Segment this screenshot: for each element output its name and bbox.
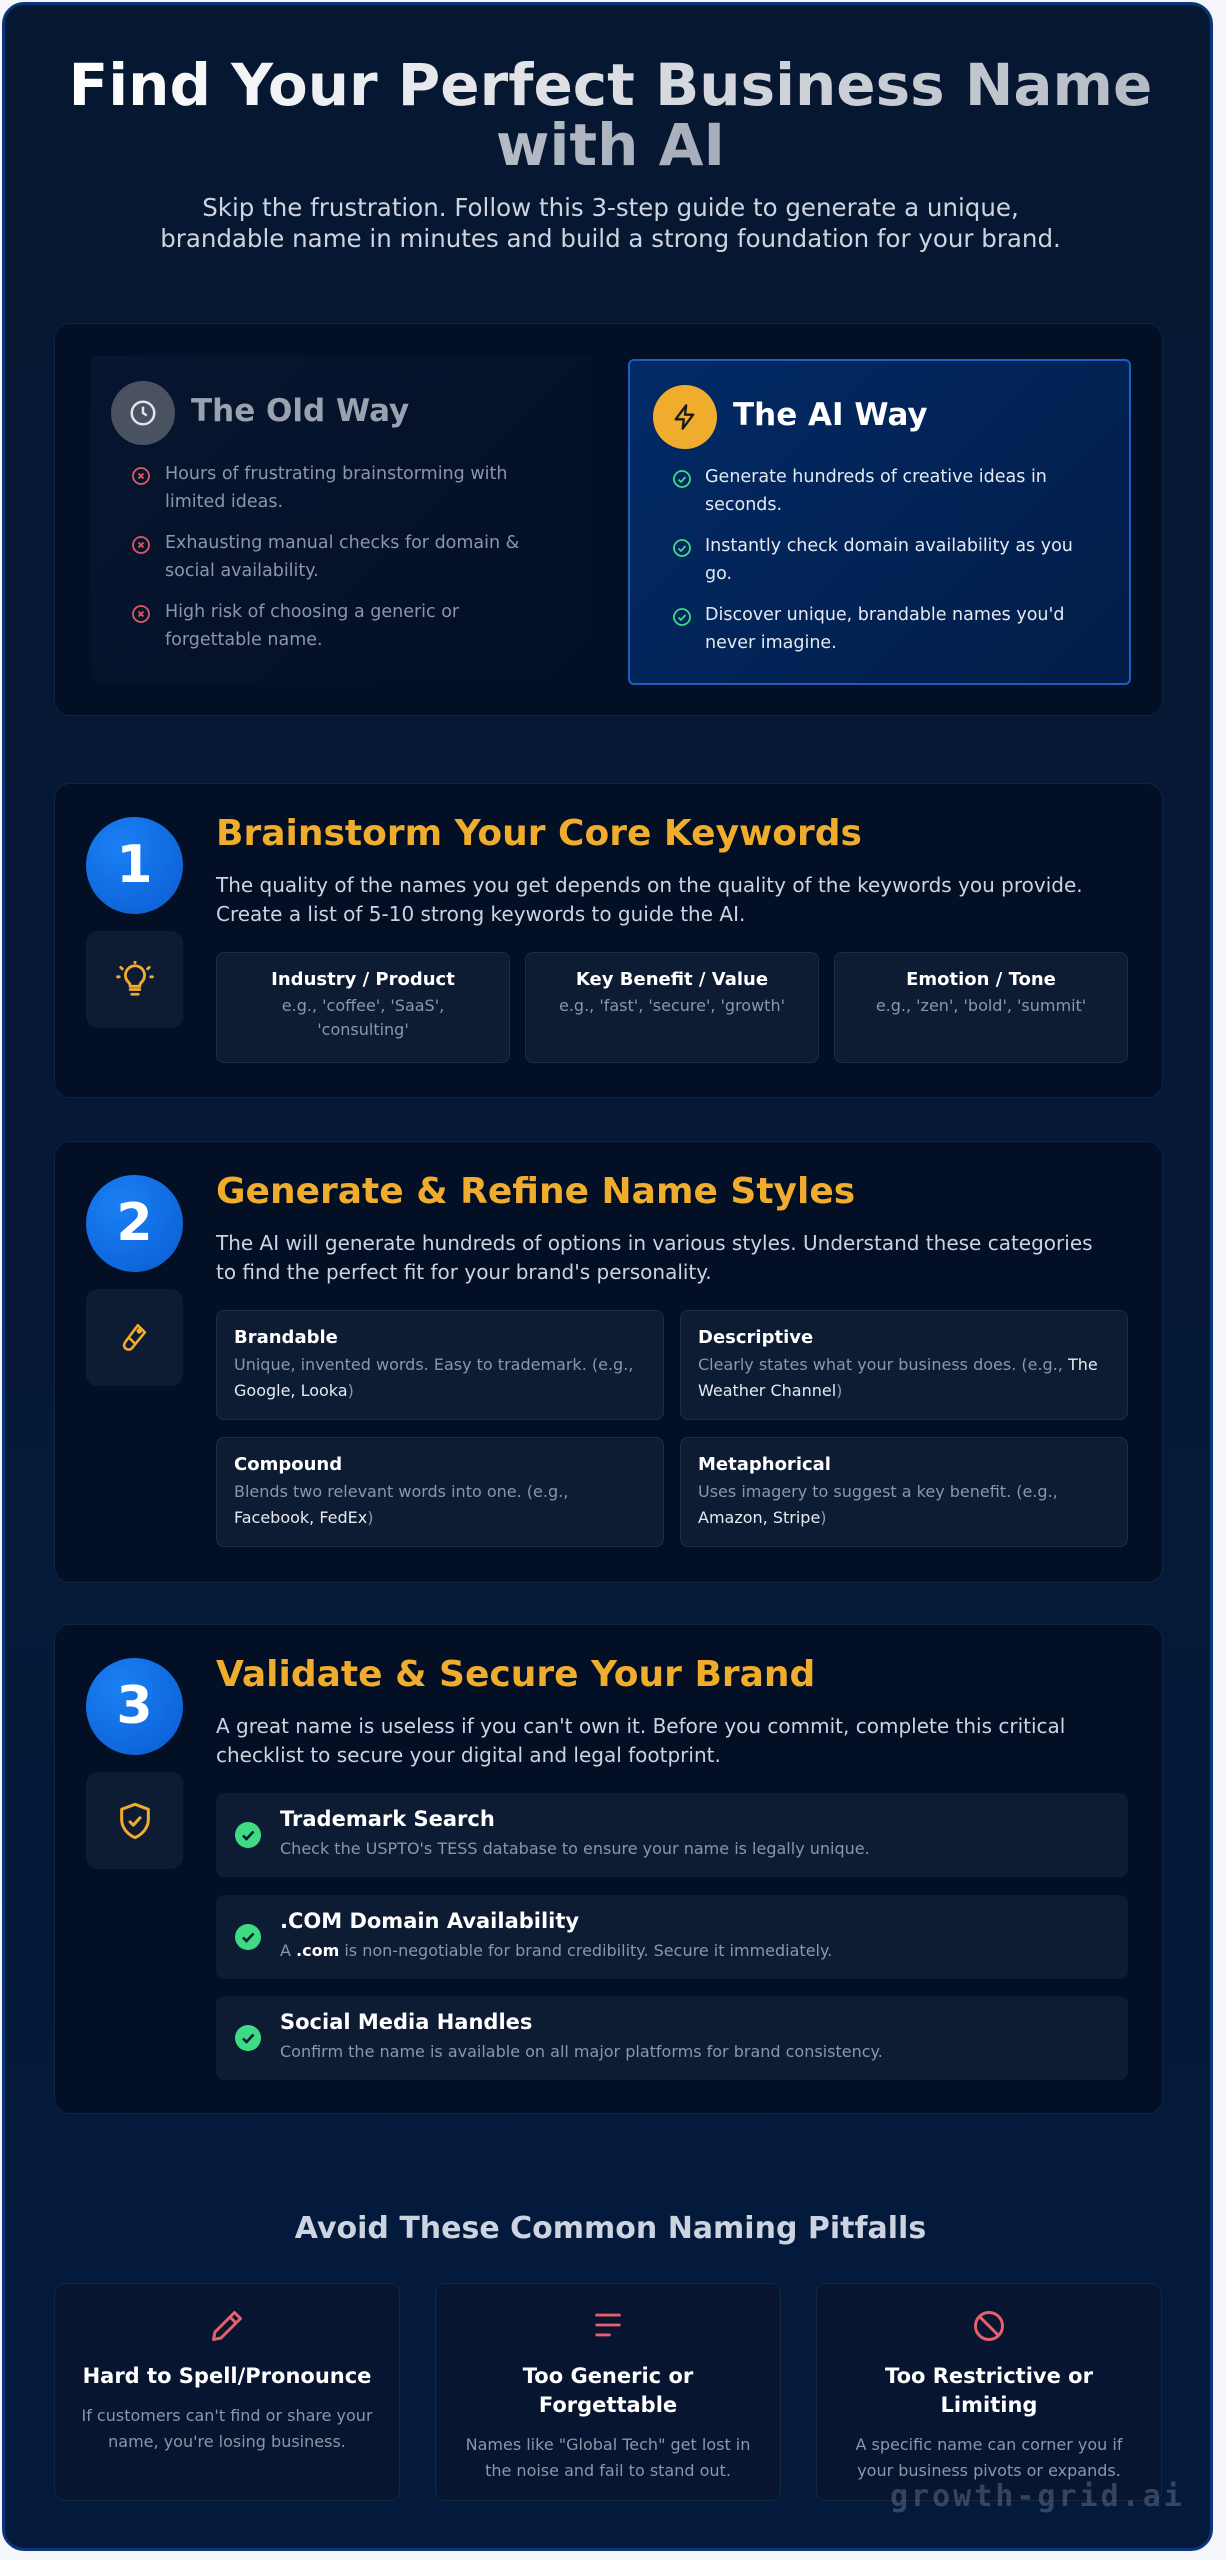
list: AI way: Generate hundreds of creative ideas in seconds. (705, 467, 1047, 515)
watermark: growth-grid.ai (890, 2479, 1185, 2514)
panel: step 2 (54, 1141, 1163, 1583)
card: metaphorical: Uses imagery to suggest a key benefit. (e.g., Amazon, Stripe) (698, 1482, 1058, 1527)
list: old way: High risk of choosing a generic or forgettable name. (165, 602, 459, 650)
title: with AI (496, 111, 725, 179)
icon: tag (86, 1289, 183, 1386)
item: trademark: Trademark Search (280, 1807, 495, 1831)
pitfall: generic: Too Generic or (523, 2364, 693, 2388)
subtitle: Skip the frustration. Follow this 3-step guide to generate a unique, (202, 193, 1019, 222)
title (69, 51, 1152, 179)
item: domain: A .com is non-negotiable for brand credibility. Secure it immediately. (280, 1941, 832, 1960)
card: industry (216, 952, 510, 1063)
style cards (216, 1310, 1128, 1547)
list: old way (132, 464, 519, 650)
panel: step 3 (54, 1624, 1163, 2114)
old way box (91, 356, 593, 682)
icon: lines (595, 2314, 621, 2336)
description: The AI will generate hundreds of options in various styles. Understand these categories to find the perfect fit for your brand's personality. (216, 1231, 1093, 1284)
pitfall: hard to spell: If customers can't find or share your name, you're losing business. (81, 2406, 373, 2451)
card: brandable (216, 1310, 664, 1420)
card: industry: Industry / Product (271, 969, 455, 990)
card: descriptive: Descriptive (698, 1327, 813, 1348)
card: emotion (834, 952, 1128, 1063)
icon: clock (111, 381, 175, 445)
checklist (216, 1793, 1128, 2080)
step number 3 (86, 1658, 183, 1755)
list: old way: Exhausting manual checks for domain & social availability. (165, 533, 519, 581)
pitfalls heading: Avoid These Common Naming Pitfalls (295, 2211, 926, 2246)
icon: ban (974, 2311, 1004, 2341)
pitfall: hard to spell (54, 2283, 400, 2501)
pitfall: hard to spell: Hard to Spell/Pronounce (83, 2364, 371, 2388)
pitfall: generic (435, 2283, 781, 2501)
item: social (216, 1996, 1128, 2080)
title: Find Your Perfect Business Name (69, 51, 1152, 119)
heading: Validate & Secure Your Brand (216, 1654, 815, 1695)
card: emotion: e.g., 'zen', 'bold', 'summit' (876, 996, 1086, 1015)
card: compound (216, 1437, 664, 1547)
heading: Brainstorm Your Core Keywords (216, 813, 862, 854)
panel: comparison (54, 323, 1163, 716)
card: brandable: Brandable (234, 1327, 338, 1348)
pitfall: restrictive: Too Restrictive or (885, 2364, 1093, 2388)
heading: AI way: The AI Way (733, 397, 928, 433)
step number 2 (86, 1175, 183, 1272)
card: compound: Blends two relevant words into one. (e.g., Facebook, FedEx) (234, 1482, 568, 1527)
card: benefit (525, 952, 819, 1063)
card: emotion: Emotion / Tone (906, 969, 1056, 990)
card: compound: Compound (234, 1454, 342, 1475)
pitfall: restrictive: Limiting (941, 2393, 1037, 2417)
card: industry: e.g., 'coffee', 'SaaS', 'consulting' (282, 996, 444, 1039)
card: descriptive (680, 1310, 1128, 1420)
heading: old way: The Old Way (191, 393, 409, 429)
step number 3: 3 (116, 1676, 153, 1736)
item: trademark (216, 1793, 1128, 1877)
list: AI way (673, 467, 1073, 653)
description: The quality of the names you get depends on the quality of the keywords you provide. Create a list of 5-10 strong keywords to guide the AI. (216, 873, 1083, 926)
item: trademark: Check the USPTO's TESS database to ensure your name is legally unique. (280, 1839, 870, 1858)
pitfall: restrictive (816, 2283, 1162, 2501)
panel: step 1 (54, 783, 1163, 1098)
heading: Generate & Refine Name Styles (216, 1171, 855, 1212)
pitfall: restrictive: A specific name can corner you if your business pivots or expands. (856, 2435, 1122, 2480)
step number 1 (86, 817, 183, 914)
item: domain: .COM Domain Availability (280, 1909, 579, 1933)
icon: shield (86, 1772, 183, 1869)
description: A great name is useless if you can't own it. Before you commit, complete this critical checklist to secure your digital and legal footprint. (216, 1714, 1065, 1767)
icon: pencil (212, 2310, 242, 2341)
keyword cards (216, 952, 1128, 1063)
icon: lightning (653, 385, 717, 449)
card: benefit: e.g., 'fast', 'secure', 'growth' (559, 996, 785, 1015)
card: benefit: Key Benefit / Value (576, 969, 768, 990)
step number 2: 2 (116, 1193, 153, 1253)
icon: lightbulb (86, 931, 183, 1028)
card: metaphorical: Metaphorical (698, 1454, 831, 1475)
step number 1: 1 (116, 835, 153, 895)
pitfall: generic: Names like "Global Tech" get lost in the noise and fail to stand out. (466, 2435, 750, 2480)
item: social: Social Media Handles (280, 2010, 532, 2034)
AI way box (628, 359, 1131, 685)
list: AI way: Instantly check domain availability as you go. (705, 536, 1073, 584)
list: AI way: Discover unique, brandable names you'd never imagine. (705, 605, 1064, 653)
pitfall: generic: Forgettable (539, 2393, 677, 2417)
card: brandable: Unique, invented words. Easy to trademark. (e.g., Google, Looka) (234, 1355, 633, 1400)
card: metaphorical (680, 1437, 1128, 1547)
card: descriptive: Clearly states what your business does. (e.g., The Weather Channel) (698, 1355, 1098, 1400)
list: old way: Hours of frustrating brainstorming with limited ideas. (165, 464, 507, 512)
subtitle: brandable name in minutes and build a strong foundation for your brand. (160, 224, 1061, 253)
item: domain (216, 1895, 1128, 1979)
subtitle (160, 193, 1061, 253)
item: social: Confirm the name is available on all major platforms for brand consistency. (280, 2042, 883, 2061)
